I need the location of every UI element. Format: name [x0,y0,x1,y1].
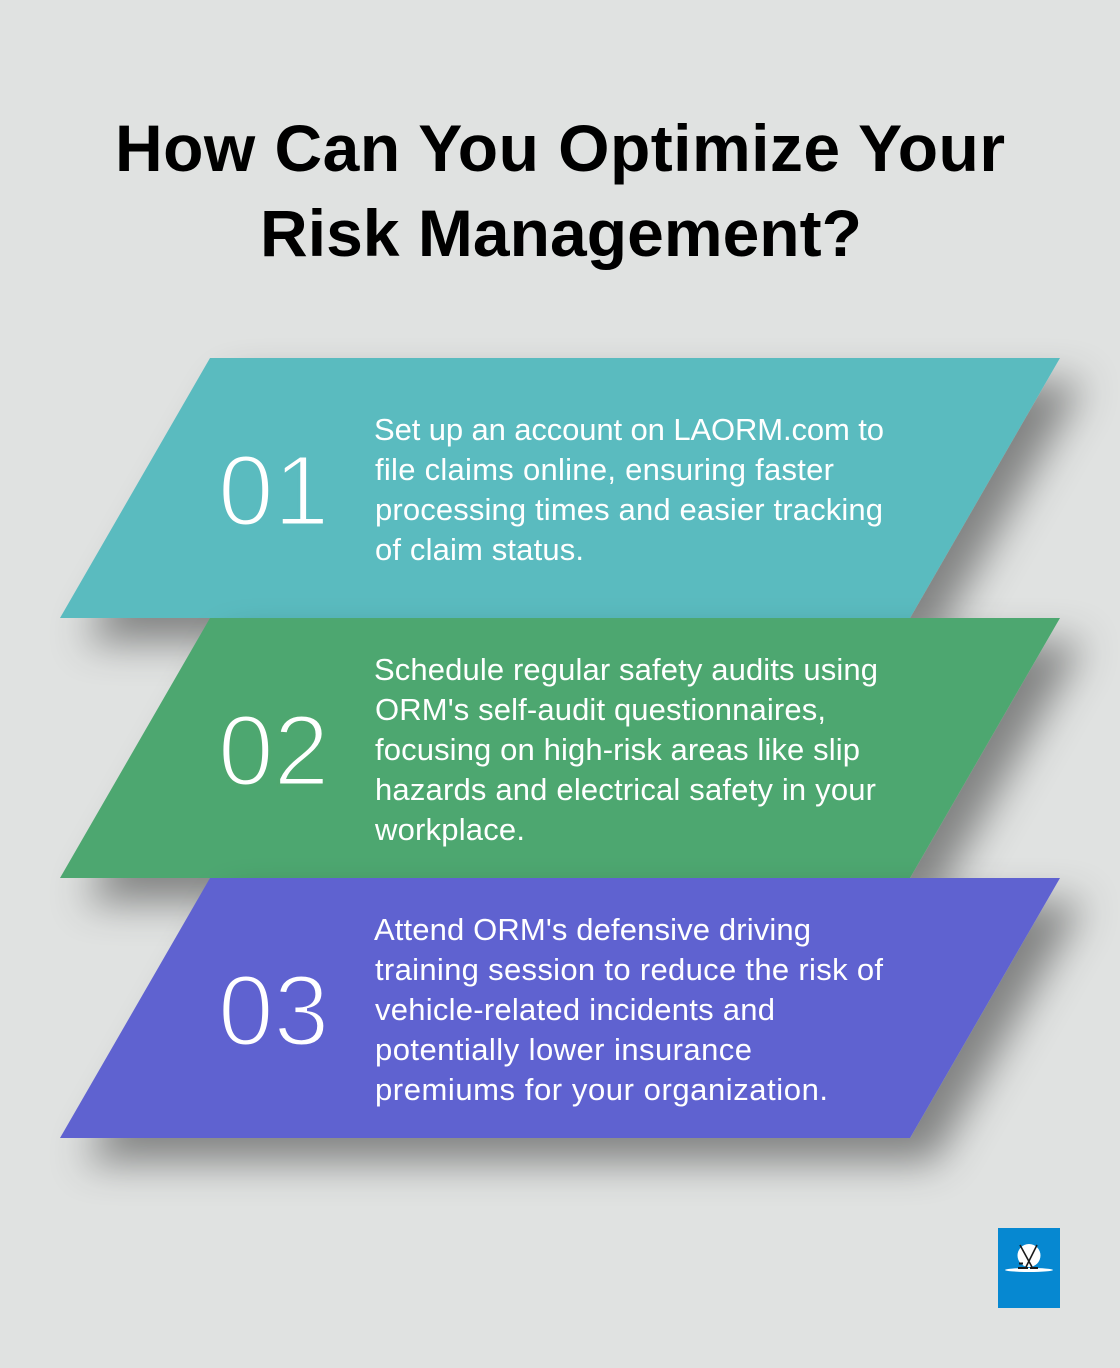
number 03: 03 [218,955,329,1067]
icon: hockey sticks logo [998,1228,1060,1308]
text: step 03 description: vehicle-related incidents and [375,992,775,1027]
text: step 02 description: focusing on high-risk areas like slip [375,732,860,767]
text: step 01 description [374,412,884,567]
text: step 01 description: processing times and easier tracking [375,492,883,527]
text: step 03 description: training session to reduce the risk of [375,952,883,987]
number 01: 01 [218,435,329,547]
text: step 02 description: hazards and electrical safety in your [375,772,876,807]
panel: step 03 [60,878,1060,1138]
text: step 01 description: Set up an account on LAORM.com to [374,412,884,447]
text: step 02 description: Schedule regular safety audits using [374,652,878,687]
text: step 03 description [374,912,883,1107]
text: step 02 description: ORM's self-audit questionnaires, [375,692,826,727]
panel background: teal parallelogram [60,358,1060,618]
text: step 03 description: potentially lower insurance [375,1032,752,1067]
title: How Can You Optimize Your [115,111,1005,185]
text: step 03 description: Attend ORM's defensive driving [374,912,811,947]
text: step 03 description: premiums for your organization. [375,1072,828,1107]
text: step 02 description: workplace. [374,812,525,847]
panel: step 02 [60,618,1060,878]
text: step 01 description: of claim status. [375,532,584,567]
text: step 01 description: file claims online, ensuring faster [375,452,834,487]
title [115,111,1005,270]
text: step 02 description [374,652,878,847]
panel background: purple parallelogram [60,878,1060,1138]
panel background: green parallelogram [60,618,1060,878]
panel: step 01 [60,358,1060,618]
title: Risk Management? [260,196,862,270]
number 02: 02 [218,695,329,807]
